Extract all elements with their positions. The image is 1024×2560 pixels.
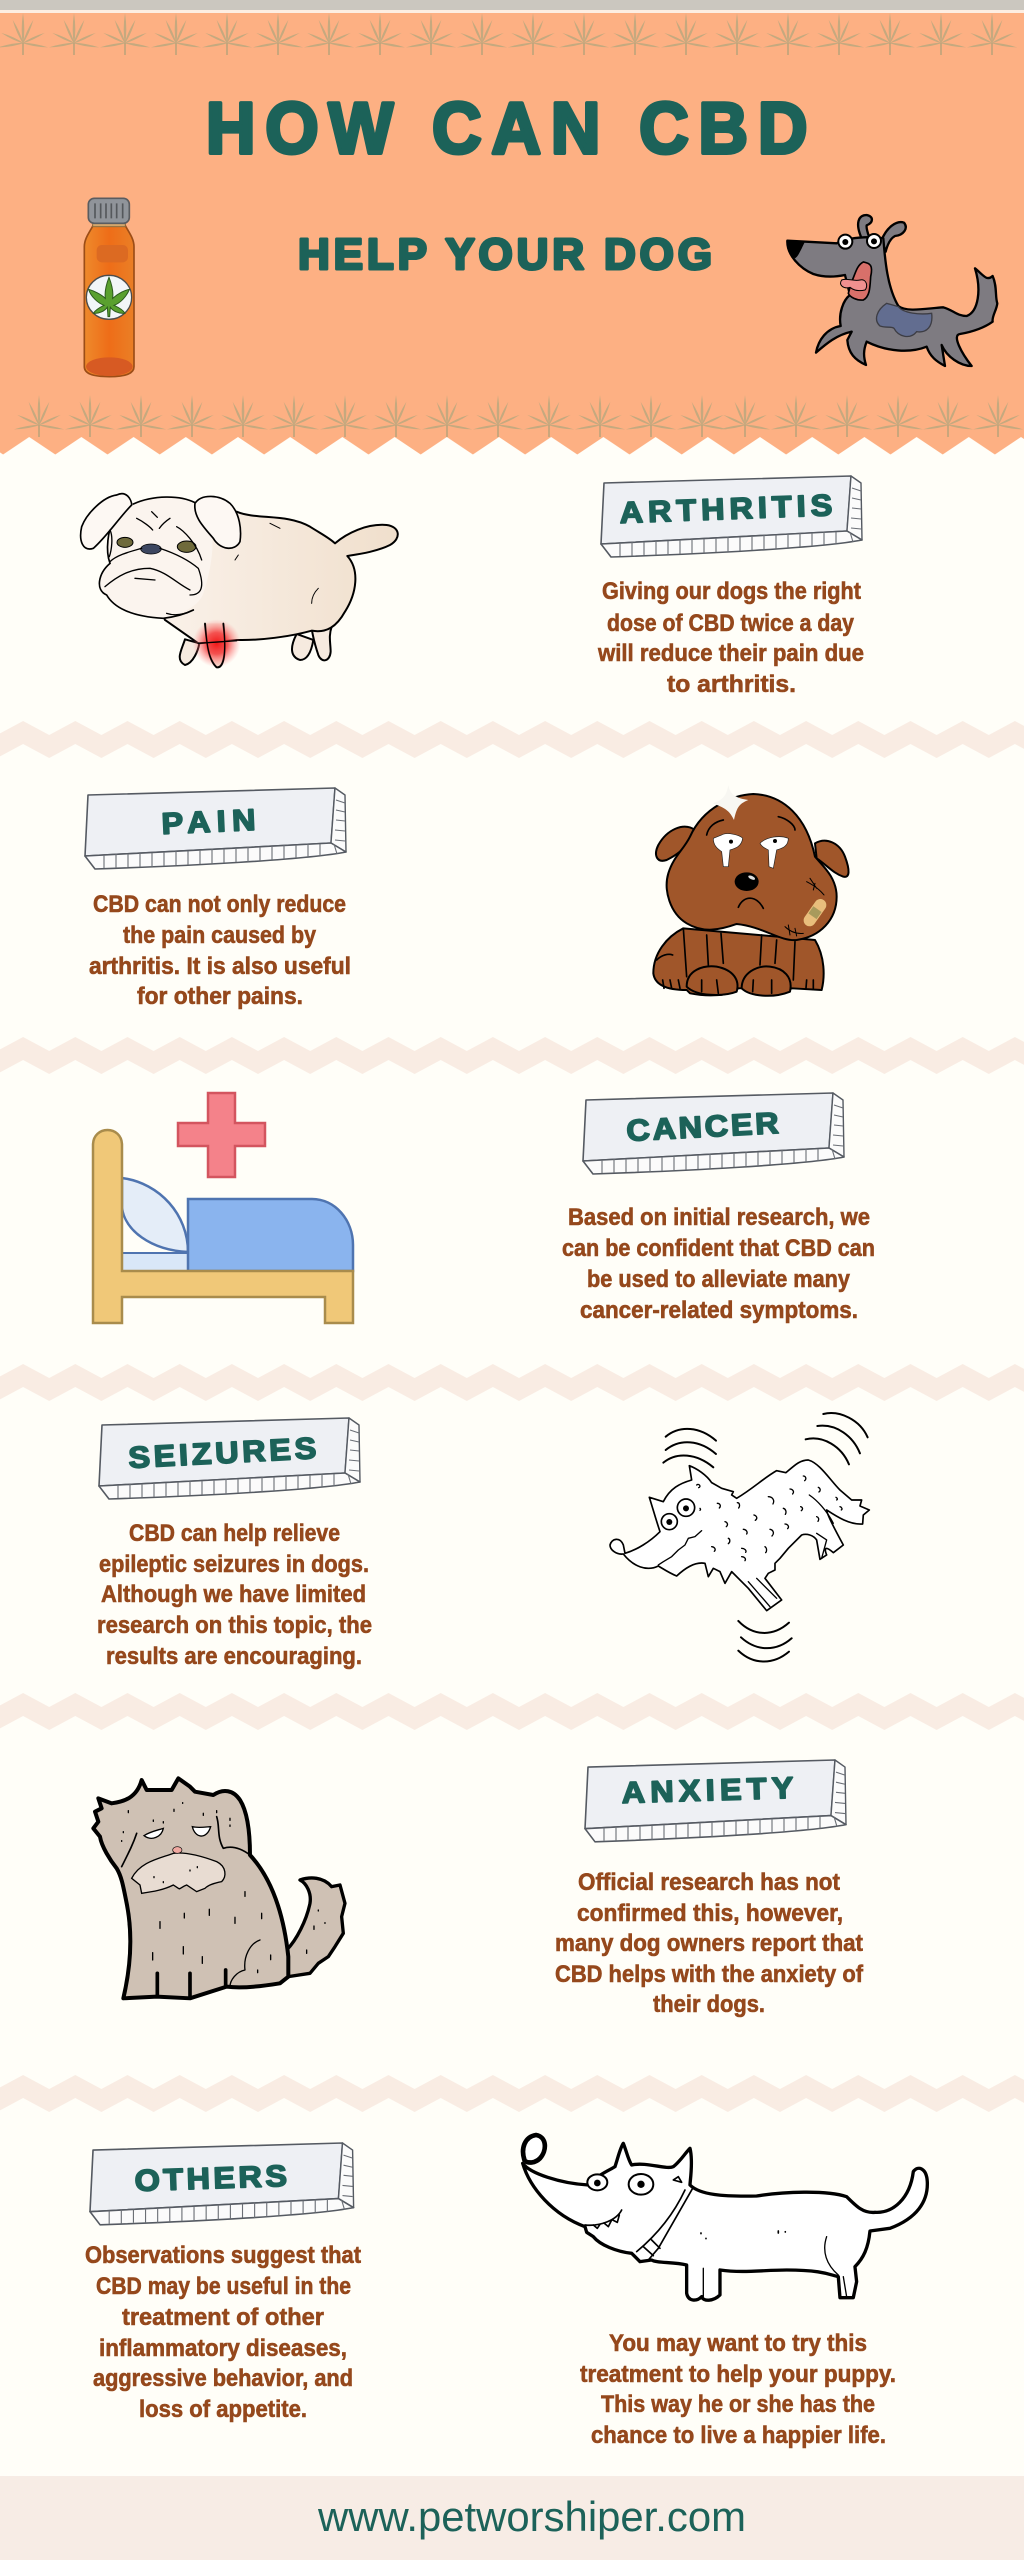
text: closing message: chance to live a happier life. (591, 2422, 886, 2449)
text: seizures: CBD can help relieve (129, 1520, 340, 1547)
badge: anxiety (585, 1760, 846, 1842)
heading: arthritis: ARTHRITIS (619, 488, 833, 530)
heading: anxiety: ANXIETY (621, 1771, 794, 1810)
text: closing message: treatment to help your puppy. (580, 2361, 896, 2388)
footer (0, 2476, 1024, 2560)
text: pain: arthritis. It is also useful (89, 953, 351, 980)
text: arthritis: Giving our dogs the right (602, 578, 861, 605)
section: cancer (93, 1093, 875, 1324)
text: others (85, 2242, 361, 2423)
illustration: hurt brown dog (653, 785, 849, 996)
badge: seizures (99, 1418, 360, 1499)
text: pain: for other pains. (137, 983, 303, 1010)
text: others: treatment of other (122, 2304, 324, 2331)
heading: cancer: CANCER (626, 1106, 779, 1148)
text: pain: the pain caused by (123, 922, 317, 949)
illustration: shaking dog (610, 1413, 869, 1662)
header panel (0, 0, 1024, 455)
text: seizures (97, 1520, 372, 1670)
text: seizures: results are encouraging. (106, 1643, 362, 1670)
text: anxiety: Official research has not (578, 1869, 840, 1896)
illustration: white dog with sore leg (81, 494, 398, 667)
text: arthritis: to arthritis. (667, 671, 796, 698)
badge: pain (85, 788, 346, 869)
text: arthritis: will reduce their pain due (597, 640, 864, 667)
badge: others (90, 2143, 354, 2225)
website url: www.petworshiper.com (317, 2493, 746, 2540)
section: others (85, 2135, 927, 2449)
heading: pain: PAIN (161, 803, 256, 841)
icon: happy grey dog (787, 215, 997, 366)
text: others: inflammatory diseases, (99, 2335, 347, 2362)
section: anxiety (93, 1760, 864, 2018)
text: closing message: This way he or she has the (601, 2391, 875, 2418)
text: cancer (562, 1204, 875, 1324)
text: seizures: research on this topic, the (97, 1612, 372, 1639)
text: closing message (580, 2330, 896, 2449)
text: anxiety: confirmed this, however, (577, 1900, 843, 1927)
illustration: smiling white dog (523, 2135, 927, 2300)
text: cancer: cancer-related symptoms. (580, 1297, 858, 1324)
text: seizures: Although we have limited (101, 1581, 366, 1608)
heading: seizures: SEIZURES (128, 1431, 317, 1475)
text: cancer: Based on initial research, we (568, 1204, 870, 1231)
icon: CBD oil bottle (84, 198, 134, 377)
badge: arthritis (601, 476, 862, 557)
section: seizures (97, 1413, 869, 1670)
text: anxiety (555, 1869, 864, 2018)
text: cancer: can be confident that CBD can (562, 1235, 875, 1262)
section: arthritis (81, 476, 864, 698)
illustration: shaggy anxious dog (93, 1778, 345, 1998)
text: others: Observations suggest that (85, 2242, 361, 2269)
section: pain (85, 785, 849, 1010)
bottom leaf border (14, 395, 1023, 437)
text: closing message: You may want to try this (609, 2330, 867, 2357)
title: HOW CAN CBD (206, 87, 807, 168)
top leaf border (0, 13, 1017, 55)
text: pain (89, 891, 351, 1010)
text: pain: CBD can not only reduce (93, 891, 346, 918)
illustration: hospital bed (93, 1093, 353, 1323)
heading: others: OTHERS (134, 2159, 287, 2198)
icon: medical cross (178, 1093, 265, 1177)
text: seizures: epileptic seizures in dogs. (99, 1551, 369, 1578)
badge: cancer (583, 1093, 844, 1174)
text: anxiety: CBD helps with the anxiety of (555, 1961, 864, 1988)
text: others: CBD may be useful in the (96, 2273, 351, 2300)
subtitle: HELP YOUR DOG (298, 230, 712, 279)
text: others: aggressive behavior, and (93, 2365, 353, 2392)
text: arthritis: dose of CBD twice a day (607, 610, 855, 637)
text: anxiety: their dogs. (653, 1991, 765, 2018)
text: others: loss of appetite. (139, 2396, 307, 2423)
text: cancer: be used to alleviate many (587, 1266, 851, 1293)
text: anxiety: many dog owners report that (555, 1930, 863, 1957)
text: arthritis (597, 578, 864, 698)
